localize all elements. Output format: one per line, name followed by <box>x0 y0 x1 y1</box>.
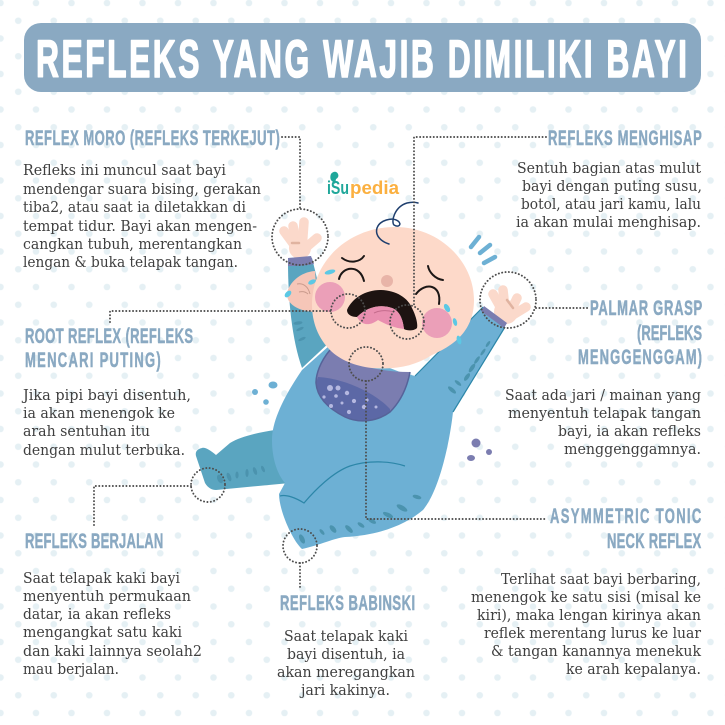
text block: Refleks Berjalan: menyentuh permukaan <box>23 588 191 605</box>
text block: Refleks Menghisap <box>516 160 702 231</box>
heading: Palmar Grasp: (REFLEKS <box>637 321 702 345</box>
text block: Reflex Moro: tiba2, atau saat ia diletakkan di <box>23 199 246 216</box>
blue splash drops <box>252 382 278 405</box>
heading: Root Reflex: MENCARI PUTING) <box>25 348 161 372</box>
left hand <box>284 222 317 255</box>
text block: Palmar Grasp: Saat ada jari / mainan yang <box>505 387 701 404</box>
mouth <box>347 290 417 330</box>
text block: Refleks Menghisap: botol, atau jari kamu, lalu <box>521 196 701 213</box>
heading: Palmar Grasp: MENGGENGGAM) <box>578 345 702 369</box>
text block: Refleks Menghisap: Sentuh bagian atas mulut <box>517 160 701 177</box>
text block: Refleks Berjalan <box>23 570 202 678</box>
body lines <box>280 307 505 503</box>
left cuff <box>288 256 314 266</box>
text block: Refleks Berjalan: mengangkat satu kaki <box>23 624 182 641</box>
panel: Refleks Menghisap <box>516 126 702 231</box>
heading: Refleks Berjalan: REFLEKS BERJALAN <box>25 529 163 553</box>
text block: Refleks Menghisap: ia akan mulai menghisap. <box>516 214 701 231</box>
text block: Reflex Moro <box>23 162 261 271</box>
heading: Root Reflex: ROOT REFLEX (REFLEKS <box>25 324 193 348</box>
text block: Palmar Grasp: menyentuh telapak tangan <box>508 405 701 422</box>
text block: Root Reflex <box>21 387 191 459</box>
title banner: REFLEKS YANG WAJIB DIMILIKI BAYI <box>36 30 687 89</box>
heading: Palmar Grasp: PALMAR GRASP <box>590 296 702 320</box>
heading: Reflex Moro: REFLEX MORO (REFLEKS TERKEJUT) <box>25 126 280 150</box>
ear <box>287 271 318 312</box>
tears <box>283 268 462 345</box>
text block: Root Reflex: ia akan menengok ke <box>23 405 175 422</box>
right hand <box>493 290 526 320</box>
text block: Root Reflex: dengan mulut terbuka. <box>23 442 185 459</box>
dotted callout connectors <box>94 137 588 589</box>
text block: Refleks Babinski: jari kakinya. <box>299 682 390 699</box>
text block: Root Reflex: Jika pipi bayi disentuh, <box>21 387 191 404</box>
nose <box>381 275 393 287</box>
text block: Asymmetric Tonic Neck Reflex: menengok ke satu sisi (misal ke <box>471 589 701 606</box>
garment stitch marks <box>216 321 491 545</box>
text block: Refleks Babinski: akan meregangkan <box>277 664 415 681</box>
text block: Refleks Babinski <box>277 628 415 699</box>
panel: Asymmetric Tonic Neck Reflex <box>471 504 702 678</box>
text block: Reflex Moro: lengan & buka telapak tangan. <box>23 254 238 271</box>
text block: Asymmetric Tonic Neck Reflex: kiri), maka lengan kirinya akan <box>477 607 701 624</box>
panel: Refleks Berjalan <box>23 529 202 678</box>
text block: Asymmetric Tonic Neck Reflex <box>471 571 701 678</box>
text block: Reflex Moro: cangkan tubuh, merentangkan <box>23 236 242 253</box>
right cuff <box>481 306 507 328</box>
text block: Reflex Moro: tempat tidur. Bayi akan mengen- <box>23 218 257 235</box>
logo: iSupedia: pedia <box>350 178 400 198</box>
heading: Asymmetric Tonic Neck Reflex: NECK REFLEX <box>607 529 701 553</box>
heading: Refleks Menghisap: REFLEKS MENGHISAP <box>548 126 702 150</box>
text block: Refleks Berjalan: datar, ia akan refleks <box>23 606 171 623</box>
text block: Palmar Grasp <box>505 387 701 458</box>
text block: Root Reflex: arah sentuhan itu <box>23 423 150 440</box>
panel: Refleks Babinski <box>277 591 415 699</box>
text block: Asymmetric Tonic Neck Reflex: ke arah kepalanya. <box>566 661 701 678</box>
text block: Refleks Menghisap: bayi dengan puting susu, <box>522 178 702 195</box>
text block: Reflex Moro: Refleks ini muncul saat bayi <box>23 162 226 179</box>
logo: iSupedia <box>327 172 400 198</box>
text block: Refleks Babinski: bayi disentuh, ia <box>287 646 405 663</box>
panel: Reflex Moro <box>23 126 280 271</box>
heading: Asymmetric Tonic Neck Reflex <box>550 504 702 553</box>
text block: Reflex Moro: mendengar suara bising, gerakan <box>23 181 261 198</box>
heading: Palmar Grasp <box>578 296 702 369</box>
text block: Palmar Grasp: menggenggamnya. <box>564 441 701 458</box>
purple splash drops <box>467 438 492 461</box>
motion lines <box>471 237 495 263</box>
cheeks <box>315 282 452 338</box>
logo: iSupedia: iSu <box>327 178 349 198</box>
body <box>272 307 505 549</box>
head <box>312 227 474 368</box>
left eye <box>339 256 364 281</box>
text block: Palmar Grasp: bayi, ia akan refleks <box>558 423 701 440</box>
text block: Refleks Berjalan: Saat telapak kaki bayi <box>23 570 180 587</box>
right eye <box>416 266 443 304</box>
text block: Asymmetric Tonic Neck Reflex: & tangan kanannya menekuk <box>491 643 701 660</box>
back leg <box>196 430 290 490</box>
panel: Palmar Grasp <box>505 296 702 458</box>
heading: Root Reflex <box>25 324 193 372</box>
bib <box>316 350 410 421</box>
panel: Root Reflex <box>21 324 193 459</box>
text block: Asymmetric Tonic Neck Reflex: Terlihat saat bayi berbaring, <box>501 571 701 588</box>
text block: Refleks Berjalan: dan kaki lainnya seolah2 <box>23 643 202 660</box>
illustration: crying baby <box>196 202 526 549</box>
hair curl <box>377 202 418 244</box>
text block: Refleks Berjalan: mau berjalan. <box>23 661 119 678</box>
heading: Asymmetric Tonic Neck Reflex: ASYMMETRIC TONIC <box>550 504 702 528</box>
heading: Refleks Babinski: REFLEKS BABINSKI <box>280 591 415 615</box>
left arm <box>288 258 332 368</box>
text block: Asymmetric Tonic Neck Reflex: reflek merentang lurus ke luar <box>484 625 701 642</box>
text block: Refleks Babinski: Saat telapak kaki <box>284 628 408 645</box>
